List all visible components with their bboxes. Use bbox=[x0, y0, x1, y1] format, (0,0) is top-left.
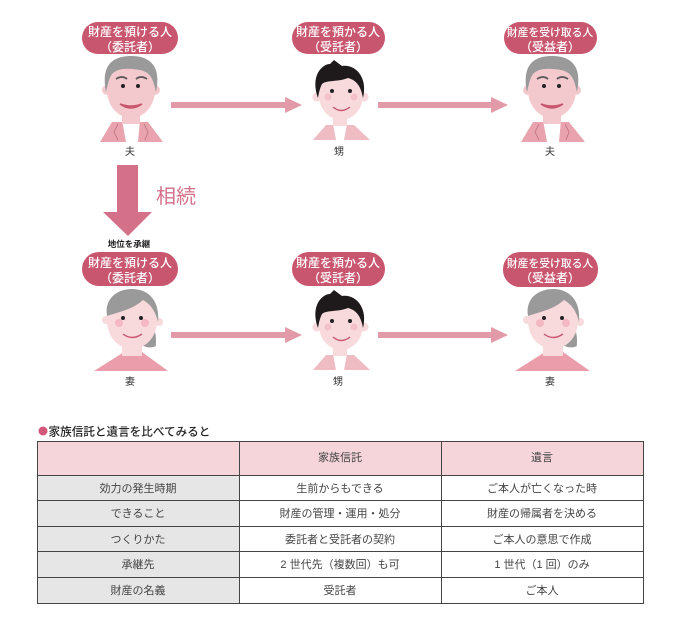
icon: elderly man bbox=[100, 56, 163, 142]
arrow: inheritance bbox=[103, 165, 152, 236]
label: status succession: 地位を承継 bbox=[108, 239, 151, 249]
column headers bbox=[318, 450, 553, 464]
badge: settlor: 財産を預ける人 bbox=[88, 255, 172, 270]
row: successor bbox=[122, 557, 590, 571]
table: family trust vs will bbox=[37, 441, 644, 604]
arrow: trustee to beneficiary bbox=[378, 97, 508, 113]
icon: elderly woman bbox=[515, 289, 590, 371]
badge: beneficiary bbox=[503, 252, 598, 287]
row: how to create: ご本人の意思で作成 bbox=[492, 532, 592, 546]
badge: settlor: （委託者） bbox=[100, 271, 160, 285]
icon: elderly man bbox=[521, 56, 585, 142]
row: effective time: 生前からもできる bbox=[296, 481, 384, 495]
row: what can be done bbox=[111, 506, 597, 520]
panel: top row, husband as settlor bbox=[82, 22, 178, 158]
badge: trustee: 財産を預かる人 bbox=[296, 255, 380, 270]
row: successor: 1 世代（1 回）のみ bbox=[494, 558, 590, 571]
row: how to create bbox=[110, 532, 592, 546]
label: nephew: 甥 bbox=[334, 146, 344, 158]
row: what can be done: できること bbox=[111, 507, 165, 520]
badge: beneficiary: （受益者） bbox=[520, 39, 580, 54]
badge: beneficiary bbox=[504, 22, 597, 54]
heading: comparison table: 家族信託と遺言を比べてみると bbox=[48, 424, 210, 438]
panel: top row, nephew as trustee bbox=[292, 22, 385, 158]
label: husband: 夫 bbox=[545, 146, 555, 158]
row: effective time: 効力の発生時期 bbox=[100, 481, 176, 495]
panel: bottom row, wife as settlor bbox=[82, 252, 178, 388]
badge: trustee bbox=[292, 252, 385, 286]
label: husband: 夫 bbox=[125, 146, 135, 158]
badge: settlor bbox=[82, 22, 178, 54]
icon: young man bbox=[312, 60, 370, 140]
badge: trustee: （受託者） bbox=[308, 270, 368, 285]
row: successor: 承継先 bbox=[122, 558, 154, 571]
row: how to create: 委託者と受託者の契約 bbox=[285, 532, 395, 546]
row: what can be done: 財産の帰属者を決める bbox=[487, 506, 597, 520]
badge: trustee bbox=[292, 22, 385, 54]
panel: bottom row, nephew as trustee bbox=[292, 252, 385, 388]
label: inheritance: 相続 bbox=[156, 185, 196, 208]
panel: bottom row, wife as beneficiary bbox=[503, 252, 598, 388]
row: property title: 財産の名義 bbox=[110, 583, 166, 597]
column headers: 遺言 bbox=[531, 450, 553, 464]
arrow: settlor to trustee bbox=[171, 97, 302, 113]
arrow: settlor to trustee bbox=[171, 327, 302, 343]
badge: settlor: （委託者） bbox=[100, 40, 160, 54]
row: property title: ご本人 bbox=[526, 583, 558, 597]
row: effective time bbox=[100, 481, 597, 495]
badge: beneficiary: （受益者） bbox=[520, 270, 580, 285]
row: what can be done: 財産の管理・運用・処分 bbox=[280, 506, 400, 520]
icon: young man bbox=[312, 290, 370, 370]
row: property title bbox=[110, 583, 558, 597]
label: wife: 妻 bbox=[125, 375, 135, 388]
row: successor: 2 世代先（複数回）も可 bbox=[280, 557, 400, 571]
column headers: 家族信託 bbox=[318, 450, 362, 464]
badge: settlor: 財産を預ける人 bbox=[88, 24, 172, 39]
row: effective time: ご本人が亡くなった時 bbox=[487, 481, 597, 495]
row: property title: 受託者 bbox=[324, 584, 356, 597]
row: how to create: つくりかた bbox=[110, 533, 166, 546]
badge: beneficiary: 財産を受け取る人 bbox=[507, 256, 593, 270]
icon: elderly woman bbox=[94, 289, 168, 371]
panel: top row, husband as beneficiary bbox=[504, 22, 597, 158]
arrow: trustee to beneficiary bbox=[378, 327, 508, 343]
label: nephew: 甥 bbox=[333, 376, 343, 388]
badge: trustee: 財産を預かる人 bbox=[296, 24, 380, 39]
badge: trustee: （受託者） bbox=[308, 39, 368, 54]
badge: settlor bbox=[82, 252, 178, 286]
badge: beneficiary: 財産を受け取る人 bbox=[507, 25, 593, 39]
label: wife: 妻 bbox=[545, 375, 555, 388]
